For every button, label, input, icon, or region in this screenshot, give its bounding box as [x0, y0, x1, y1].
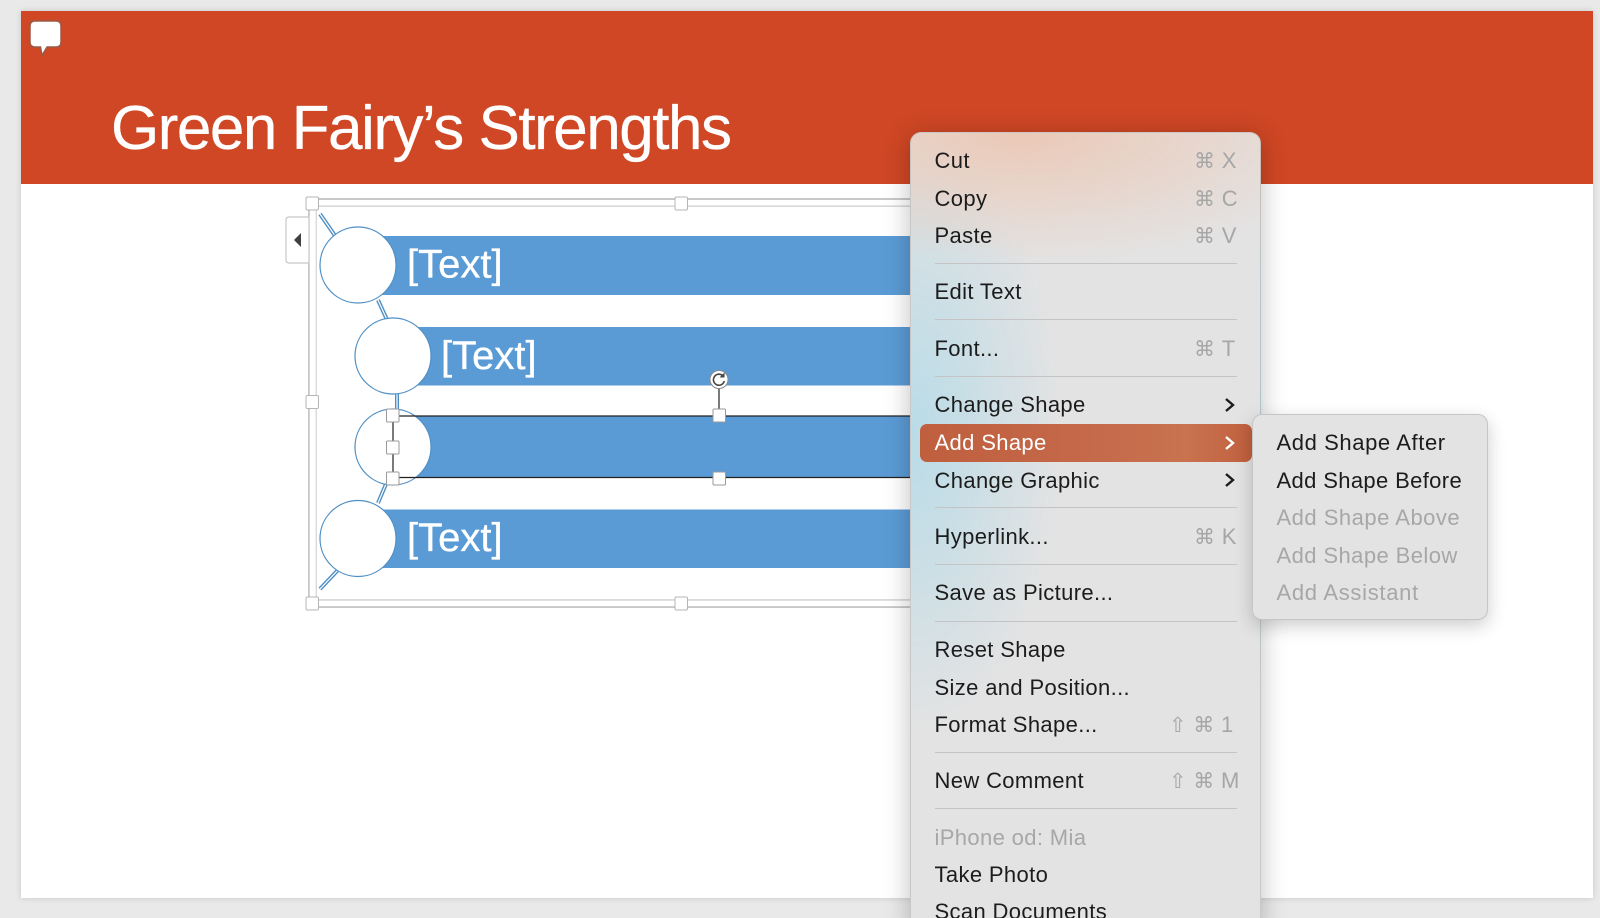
menu item: Copy: Copy: [934, 186, 987, 211]
submenu item: Add Assistant: Add Assistant: [1276, 580, 1419, 605]
menu item: Hyperlink: Hyperlink...: [934, 524, 1049, 549]
selected shape outline and handles: [386, 370, 915, 485]
submenu item: Add Shape Before: Add Shape Before: [1276, 468, 1462, 493]
shortcut: Copy: ⌘ C: [1194, 186, 1238, 211]
row 4: bar, circle, text: [Text]: [407, 516, 503, 560]
shortcut: Format Shape: ⇧ ⌘ 1: [1169, 712, 1233, 737]
connector arc: [320, 214, 397, 589]
menu item: Edit Text: Edit Text: [934, 279, 1022, 304]
Add Shape highlight: [920, 424, 1252, 462]
menu item: Reset Shape: Reset Shape: [934, 637, 1066, 662]
row 4: bar, circle, text: [320, 500, 915, 576]
shortcut: Cut: ⌘ X: [1194, 148, 1236, 173]
submenu item: Add Shape After: Add Shape After: [1276, 430, 1446, 455]
icon: chevron: [1225, 473, 1235, 487]
context menu: [910, 132, 1261, 918]
frame handles: [306, 197, 688, 610]
submenu item: Add Shape Below: Add Shape Below: [1276, 543, 1458, 568]
row 2: bar, circle, text: [355, 318, 915, 394]
row 1: bar, circle, text: [320, 227, 915, 303]
submenu: Add Shape: [1252, 414, 1488, 620]
menu item: New Comment: New Comment: [934, 768, 1084, 793]
menu item: Add Shape: Add Shape: [934, 430, 1047, 455]
icon: comment bubble: [29, 20, 62, 58]
shortcut: Paste: ⌘ V: [1194, 223, 1236, 248]
menu item: Size and Position: Size and Position...: [934, 674, 1130, 700]
row 2: bar, circle, text: [Text]: [441, 334, 537, 378]
shortcut: Font: ⌘ T: [1194, 336, 1235, 361]
icon: chevron white: [1225, 436, 1235, 450]
menu item: Format Shape: Format Shape...: [934, 712, 1098, 737]
title: Green Fairy’s Strengths: [111, 94, 731, 163]
submenu item: Add Shape Above: Add Shape Above: [1276, 505, 1460, 530]
shortcut: New Comment: ⇧ ⌘ M: [1169, 768, 1239, 793]
row 3: selected bar and circle: [355, 409, 915, 485]
header banner: [20, 11, 1593, 184]
row 1: bar, circle, text: [Text]: [407, 242, 503, 286]
menu item: Take Photo: Take Photo: [934, 862, 1048, 887]
icon: chevron: [1225, 398, 1235, 412]
menu item: Change Shape: Change Shape: [934, 392, 1086, 417]
selection frame: [309, 199, 936, 607]
collapse tab with arrow: [286, 217, 309, 263]
menu item: Change Graphic: Change Graphic: [934, 468, 1100, 493]
menu item: iPhone od: Mia: iPhone od: Mia: [934, 825, 1086, 850]
menu item: Font: Font...: [934, 336, 999, 361]
menu item: Save as Picture: Save as Picture...: [934, 580, 1113, 605]
menu item: Paste: Paste: [934, 223, 993, 248]
menu item: Cut: Cut: [934, 148, 970, 173]
shortcut: Hyperlink: ⌘ K: [1194, 524, 1236, 549]
